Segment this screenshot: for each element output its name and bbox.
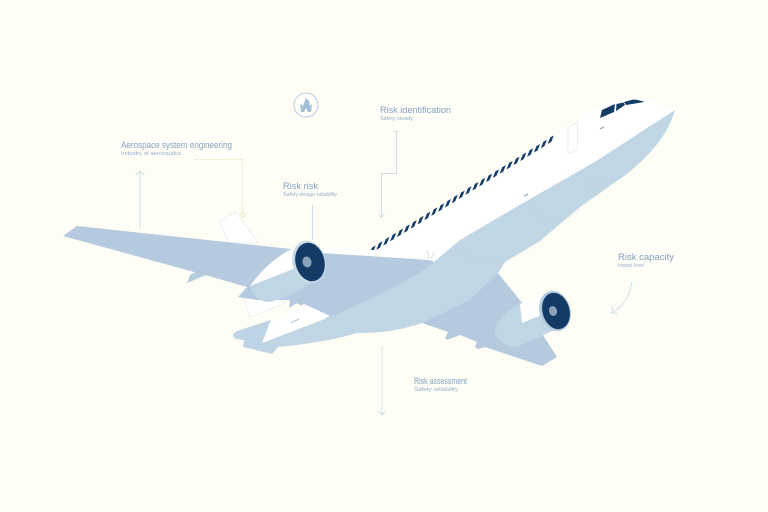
label: risk capacity: Risk capacity (618, 252, 675, 262)
fuselage upper white (372, 99, 675, 262)
engine pylon fin (289, 298, 305, 308)
engine rim (534, 287, 576, 335)
engine fan (538, 289, 574, 333)
windows row (370, 136, 554, 254)
wing root white strip (320, 247, 431, 260)
cockpit windshield (600, 100, 644, 118)
nacelle top highlight (520, 293, 544, 323)
nacelle top highlight (250, 246, 297, 286)
label: risk risk: Risk risk (283, 181, 319, 191)
arrow: curved to right engine (612, 281, 632, 314)
label: aerospace system engineering (121, 140, 232, 157)
fuselage small marks (524, 127, 604, 196)
white flap under wing (262, 304, 330, 343)
flap mark (291, 319, 299, 323)
label: risk capacity: Impact level (618, 263, 644, 269)
fuselage belly (262, 110, 675, 347)
lower tail fin (243, 290, 285, 317)
belly detail marks (460, 178, 603, 263)
label: risk identification (380, 105, 451, 122)
label: risk identification: Safety steady (380, 116, 414, 122)
label: risk risk (283, 181, 338, 198)
engine hub (548, 305, 558, 317)
arrow: up to aerospace label (136, 171, 144, 228)
door outline (568, 122, 578, 153)
left wing flap fin (187, 267, 206, 283)
icon: flame badge (294, 93, 318, 117)
arrow: risk identification (378, 132, 398, 218)
tail stabilizers (233, 320, 278, 354)
connector: risk risk to engine (312, 205, 314, 240)
label: aerospace system engineering: Industry of aeronautics (121, 151, 182, 157)
arrow: down from fuselage (378, 347, 386, 415)
upper tail fin (220, 212, 258, 243)
left engine (250, 237, 330, 302)
right wing (422, 273, 557, 366)
left wing (63, 226, 450, 320)
label: risk assessment: Safety reliability (414, 387, 459, 393)
nacelle (495, 300, 561, 347)
label: risk assessment: Risk assessment (414, 376, 467, 386)
airplane illustration (63, 99, 675, 366)
label: aerospace system engineering: Aerospace system engineering (121, 140, 232, 150)
right engine (495, 287, 576, 347)
nacelle (250, 246, 318, 302)
wing root detail (426, 250, 434, 259)
label: risk assessment (414, 376, 467, 393)
engine fan (291, 240, 329, 284)
connector: dotted to tail fin (195, 160, 245, 217)
engine rim (288, 237, 330, 287)
label: risk capacity (618, 252, 675, 269)
engine hub (301, 256, 313, 268)
label: risk risk: Safety design reliability (283, 192, 338, 198)
label: risk identification: Risk identification (380, 105, 451, 115)
